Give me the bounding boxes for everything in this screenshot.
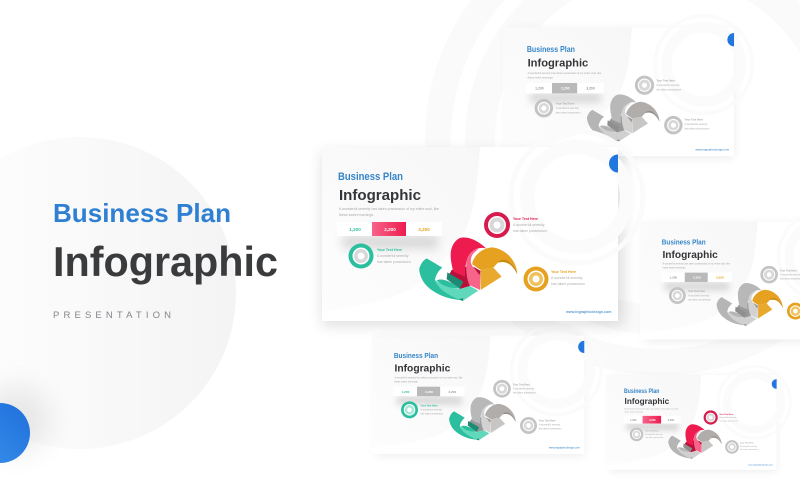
panel: slide bottom left (teal highlight): A wonderful serenity bbox=[539, 423, 561, 426]
panel: main slide (full colour): A wonderful serenity bbox=[513, 223, 545, 227]
panel: slide right (amber highlight): A wonderful serenity has taken possession of my entire soul, like bbox=[662, 263, 731, 266]
panel: slide top (all grey): A wonderful serenity has taken possession of my entire soul, like bbox=[528, 71, 602, 75]
panel: slide right (amber highlight): Business Plan bbox=[662, 237, 706, 246]
panel: slide bottom left (teal highlight) bbox=[372, 325, 601, 456]
panel: slide top (all grey): 3,200 bbox=[586, 87, 595, 91]
panel: main slide (full colour): www.ingraphicdesign.com bbox=[565, 310, 611, 314]
panel: slide bottom left (teal highlight): has taken possession bbox=[539, 428, 562, 431]
panel: slide bottom left (teal highlight): these sweet mornings. bbox=[395, 381, 419, 384]
panel: slide bottom right (red highlight): 1,200 bbox=[630, 419, 637, 422]
panel: slide bottom right (red highlight): Infographic bbox=[625, 397, 670, 406]
panel: slide bottom right (red highlight) bbox=[607, 366, 790, 471]
panel: slide top (all grey): Your Text Here bbox=[656, 79, 675, 83]
panel: slide bottom left (teal highlight): www.ingraphicdesign.com bbox=[549, 447, 581, 450]
main heading: Business Plan bbox=[53, 198, 231, 228]
panel: main slide (full colour): A wonderful serenity bbox=[551, 276, 583, 280]
panel: slide right (amber highlight): Infographic bbox=[662, 250, 718, 261]
panel: main slide (full colour): Your Text Here bbox=[513, 217, 538, 221]
panel: slide bottom left (teal highlight): has taken possession bbox=[513, 392, 536, 395]
panel: slide bottom right (red highlight): has taken possession bbox=[645, 436, 663, 439]
panel: slide bottom right (red highlight): these sweet mornings. bbox=[625, 411, 644, 414]
panel: main slide (full colour): Business Plan bbox=[338, 171, 403, 183]
panel: main slide (full colour): these sweet mornings. bbox=[339, 213, 374, 217]
panel: slide top (all grey): 1,200 bbox=[535, 87, 544, 91]
panel: slide bottom right (red highlight): has taken possession bbox=[719, 419, 738, 422]
panel: slide bottom left (teal highlight): 1,200 bbox=[402, 390, 410, 394]
panel: slide bottom right (red highlight): Your Text Here bbox=[719, 413, 734, 416]
panel: main slide (full colour): Infographic bbox=[339, 187, 421, 204]
panel: slide bottom right (red highlight): Business Plan bbox=[624, 389, 660, 395]
panel: slide bottom left (teal highlight): A wonderful serenity bbox=[513, 387, 535, 390]
large pale circle bbox=[0, 137, 236, 449]
panel: slide bottom right (red highlight): A wonderful serenity bbox=[740, 445, 757, 448]
panel: slide top (all grey): A wonderful serenity bbox=[684, 122, 708, 126]
panel: main slide (full colour) bbox=[322, 131, 643, 326]
panel: slide right (amber highlight): 3,200 bbox=[716, 276, 724, 280]
panel: slide right (amber highlight): 1,200 bbox=[669, 276, 677, 280]
panel: slide bottom left (teal highlight): Your Text Here bbox=[420, 404, 438, 407]
panel: slide top (all grey): Infographic bbox=[528, 58, 588, 70]
panel: slide top (all grey): A wonderful serenity bbox=[656, 83, 680, 87]
main heading: Infographic bbox=[53, 238, 278, 285]
panel: slide top (all grey): www.ingraphicdesign.com bbox=[696, 147, 730, 151]
panel: slide right (amber highlight): Your Text Here bbox=[688, 290, 706, 293]
panel: slide top (all grey): has taken possession bbox=[556, 110, 581, 114]
panel: slide bottom left (teal highlight): has taken possession bbox=[420, 413, 444, 416]
panel: slide top (all grey): these sweet mornings. bbox=[528, 76, 554, 80]
panel: slide top (all grey): 2,200 bbox=[561, 87, 570, 91]
icon: blue corner circle bbox=[0, 403, 30, 463]
panel: slide bottom right (red highlight): 2,200 bbox=[649, 419, 656, 422]
panel: slide bottom right (red highlight): A wonderful serenity has taken possession of my entire soul, like bbox=[625, 407, 679, 410]
panel: slide top (all grey): A wonderful serenity bbox=[556, 106, 580, 110]
panel: slide right (amber highlight): has taken possession bbox=[688, 298, 712, 301]
panel: slide right (amber highlight): these sweet mornings. bbox=[662, 267, 686, 270]
panel: main slide (full colour): A wonderful serenity bbox=[377, 254, 409, 258]
panel: slide bottom left (teal highlight): Infographic bbox=[395, 364, 451, 375]
panel: slide bottom left (teal highlight): A wonderful serenity has taken possession of my entire soul, like bbox=[395, 377, 463, 380]
panel: slide bottom right (red highlight): has taken possession bbox=[740, 448, 758, 451]
panel: slide bottom right (red highlight): www.ingraphicdesign.com bbox=[748, 464, 773, 466]
panel: main slide (full colour): has taken possession bbox=[513, 229, 547, 233]
panel: main slide (full colour): has taken possession bbox=[377, 260, 411, 264]
panel: slide bottom left (teal highlight): 3,200 bbox=[448, 390, 457, 394]
panel: slide bottom left (teal highlight): Your Text Here bbox=[539, 419, 556, 422]
panel: slide bottom right (red highlight): A wonderful serenity bbox=[645, 433, 662, 436]
panel: main slide (full colour): 1,200 bbox=[349, 227, 361, 232]
panel: main slide (full colour): A wonderful serenity has taken possession of my entire soul, like bbox=[339, 207, 439, 211]
panel: main slide (full colour): has taken possession bbox=[551, 282, 585, 286]
panel: main slide (full colour): Your Text Here bbox=[551, 270, 576, 274]
panel: slide bottom left (teal highlight): Your Text Here bbox=[513, 383, 531, 386]
panel: slide right (amber highlight): 2,200 bbox=[693, 276, 701, 280]
panel: slide top (all grey): Business Plan bbox=[527, 45, 575, 54]
blue circle shadow bbox=[0, 386, 50, 454]
panel: main slide (full colour): 3,200 bbox=[418, 227, 430, 232]
panel: slide bottom right (red highlight): Your Text Here bbox=[645, 430, 660, 433]
main heading bbox=[53, 198, 278, 285]
panel: slide right (amber highlight): Your Text Here bbox=[780, 269, 797, 272]
panel: slide bottom right (red highlight): 3,200 bbox=[668, 419, 675, 422]
panel: slide top (all grey): has taken possession bbox=[656, 87, 682, 91]
panel: slide top (all grey): Your Text Here bbox=[684, 118, 703, 122]
panel: slide bottom left (teal highlight): A wonderful serenity bbox=[420, 409, 443, 412]
panel: slide right (amber highlight) bbox=[640, 211, 800, 341]
panel: slide bottom right (red highlight): A wonderful serenity bbox=[719, 416, 736, 419]
panel: slide bottom left (teal highlight): 2,200 bbox=[425, 390, 433, 394]
panel: slide top (all grey): Your Text Here bbox=[556, 101, 575, 105]
panel: slide right (amber highlight): A wonderful serenity bbox=[688, 294, 710, 297]
panel: main slide (full colour): Your Text Here bbox=[377, 248, 402, 252]
subheading: PRESENTATION bbox=[53, 310, 171, 321]
panel: slide top (all grey): has taken possession bbox=[684, 127, 710, 131]
panel: main slide (full colour): 2,200 bbox=[384, 227, 396, 232]
background concentric rings bbox=[438, 0, 800, 362]
panel: slide bottom right (red highlight): Your Text Here bbox=[740, 442, 755, 445]
panel: slide bottom left (teal highlight): Business Plan bbox=[394, 351, 438, 360]
panel: slide top (all grey) bbox=[503, 16, 753, 158]
